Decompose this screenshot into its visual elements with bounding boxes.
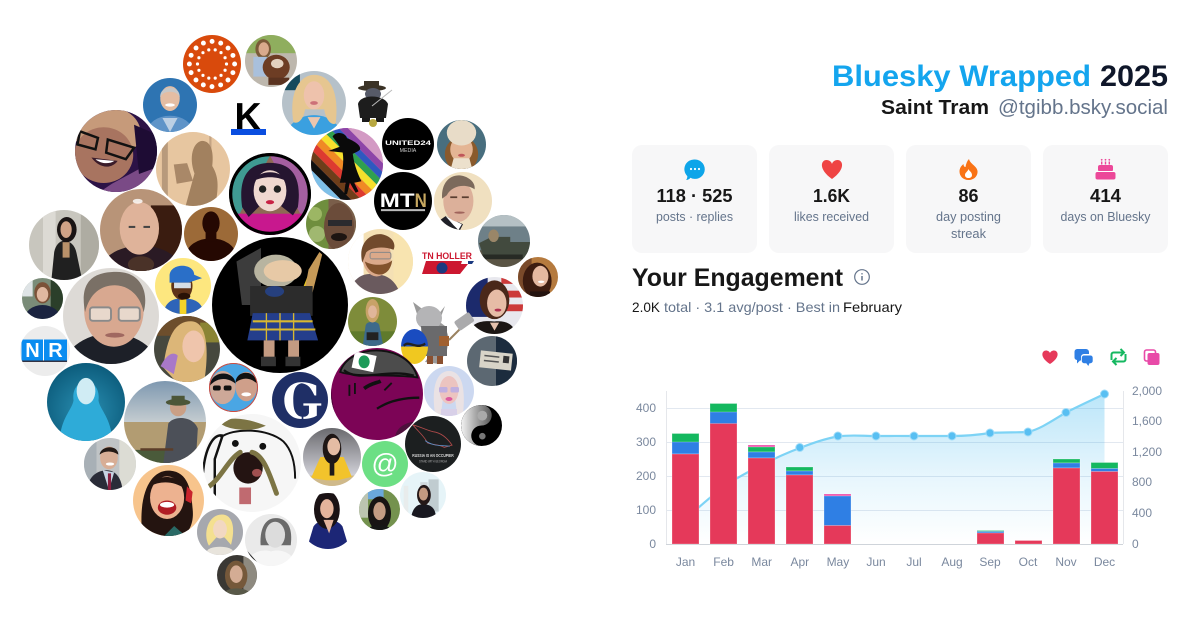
stacked bars: [672, 404, 1118, 544]
stat card: posts and replies: posts · replies: [656, 209, 733, 224]
avatar: man with glasses, large: [63, 268, 159, 364]
user name and handle: Saint Tram: [881, 97, 989, 119]
month labels: Nov: [1055, 555, 1077, 569]
stat card: likes received: [769, 145, 894, 253]
avatar: United24 Media: [382, 118, 434, 170]
avatar: MTN logo: MT: [380, 190, 415, 212]
avatar: dark silhouette: [184, 207, 238, 261]
avatar: Russia is an occupier map: [405, 416, 461, 472]
icon: speech bubble: [684, 159, 705, 180]
avatar: tank: [478, 215, 530, 267]
heading: Your Engagement: Your Engagement: [632, 264, 844, 292]
avatar: street poster: [467, 336, 517, 386]
month labels: Apr: [790, 555, 809, 569]
month labels: May: [827, 555, 849, 569]
engagement summary: [632, 299, 902, 315]
avatar: blonde woman glasses: [424, 366, 474, 416]
avatar: woman in yellow jacket: [303, 428, 361, 486]
stat card: posts and replies: [632, 145, 757, 253]
avatar: smiling man in blue: [143, 78, 197, 132]
avatar: sunglasses man: [306, 199, 356, 249]
bar: May: [824, 494, 851, 544]
stat card: likes received: 1.6K: [813, 186, 850, 206]
chart legend: [1042, 349, 1160, 366]
left axis labels: 400: [636, 401, 656, 415]
stat card: day posting streak: [906, 145, 1031, 253]
avatar: rainbow silhouette: [311, 128, 383, 200]
month labels: Jan: [676, 555, 695, 569]
avatar: winking man in suit: [434, 172, 492, 230]
avatar: woman near glass towers: [400, 472, 446, 518]
avatar: MTN logo: [374, 172, 432, 230]
bar: Mar: [748, 445, 775, 544]
icon: likes heart: [1042, 350, 1058, 364]
right axis labels: 2,000: [1132, 384, 1162, 398]
month labels: Mar: [751, 555, 772, 569]
avatar: Russia is an occupier map: STAND WITH GEORGIA: [419, 459, 448, 463]
left axis labels: 200: [636, 469, 656, 483]
avatar: green at sign: @: [371, 448, 399, 478]
icon: repost arrows: [1112, 349, 1126, 365]
avatar: two men with sunglasses: [209, 363, 258, 412]
avatar: anime blonde: [197, 509, 243, 555]
avatar: United24 Media: UNITED24: [385, 140, 431, 147]
icon: replies bubbles: [1074, 349, 1093, 366]
icon: quotes copy: [1144, 350, 1160, 365]
avatar: black and white woman: [245, 514, 297, 566]
user name and handle: [881, 97, 1168, 119]
engagement chart: [636, 384, 1162, 569]
month labels: Feb: [713, 555, 734, 569]
avatar: dark-haired woman outdoors: [359, 489, 400, 530]
bar: Nov: [1053, 459, 1080, 544]
avatar: woman in field: [348, 297, 397, 346]
avatar: shadow of woman: [156, 132, 230, 206]
avatar: anime girl with pink top: [229, 153, 311, 235]
icon: birthday cake: [1096, 159, 1116, 180]
avatar: bearded man in hoodie: [348, 229, 413, 294]
avatar: NR logo: N: [25, 340, 40, 362]
left axis labels: [636, 401, 656, 551]
cumulative area and line: [686, 390, 1108, 544]
bar: Feb: [710, 404, 737, 544]
avatar: small woman dark blazer: [22, 278, 63, 319]
avatar: dog with mustache drawing: [203, 414, 301, 512]
avatar: The Guardian G: [272, 372, 328, 428]
month labels: Dec: [1094, 555, 1115, 569]
avatar: woman with US flag: [466, 277, 523, 334]
logo: TN Holler: [422, 251, 474, 274]
avatar: MTN logo: N: [415, 190, 427, 212]
month labels: Sep: [979, 555, 1001, 569]
left axis labels: 100: [636, 503, 656, 517]
avatar: man at scenic overlook: [124, 381, 206, 463]
avatar: onion eggplant cartoon: [331, 348, 423, 440]
right axis labels: 800: [1132, 475, 1152, 489]
month labels: [676, 555, 1115, 569]
right panel: [600, 0, 1200, 630]
engagement summary: February: [843, 299, 902, 315]
avatar: Ukrainian shield: [401, 329, 428, 364]
avatar: suit man by building: [84, 438, 136, 490]
title: 2025: [1100, 60, 1168, 93]
user name and handle: @tgibb.bsky.social: [998, 97, 1168, 119]
logo: viking doge with hammer: [413, 302, 474, 364]
stat card: day posting streak: day posting: [936, 209, 1001, 224]
avatar: NR logo: R: [48, 340, 63, 362]
icon: flame: [960, 159, 978, 180]
chart gridlines and axes: [666, 391, 1124, 544]
avatar: doge in kilt, big black circle: [212, 237, 348, 373]
avatar: green at sign: [362, 441, 408, 487]
avatar: NR logo: [20, 326, 70, 376]
right axis labels: 1,200: [1132, 445, 1162, 459]
avatar: woman in beanie: [437, 120, 486, 169]
left axis labels: 0: [649, 537, 656, 551]
avatar cluster: [20, 35, 558, 595]
stat card: days on Bluesky: [1043, 145, 1168, 253]
avatar: brunette woman Kate: [518, 257, 558, 297]
logo: masked ninja character: [358, 81, 392, 127]
avatar: woman in black jacket: [29, 210, 99, 280]
avatar: laughing woman with red flower: [133, 465, 204, 536]
icon: info: [855, 270, 869, 284]
avatar: yin yang: [461, 405, 502, 446]
left axis labels: 300: [636, 435, 656, 449]
stat card: days on Bluesky: days on Bluesky: [1060, 209, 1151, 224]
icon: heart: [822, 160, 842, 179]
right axis labels: 0: [1132, 537, 1139, 551]
engagement summary: total · 3.1 avg/post · Best in: [664, 299, 840, 315]
stat card: day posting streak: streak: [951, 226, 986, 241]
stat card: days on Bluesky: 414: [1090, 186, 1121, 206]
right axis labels: 400: [1132, 506, 1152, 520]
bar: Dec: [1091, 462, 1118, 544]
avatar: United24 Media: MEDIA: [400, 148, 417, 154]
title: Bluesky Wrapped: [832, 60, 1091, 93]
right axis labels: 1,600: [1132, 414, 1162, 428]
avatar: orange rings: [183, 35, 241, 93]
right axis labels: [1132, 384, 1162, 551]
avatar: woman with dog: [245, 35, 297, 87]
stat card: likes received: likes received: [794, 209, 869, 224]
month labels: Aug: [941, 555, 963, 569]
stat card: day posting streak: 86: [958, 186, 978, 206]
engagement summary: 2.0K: [632, 299, 661, 315]
bar: Apr: [786, 467, 813, 544]
avatar: man with glasses, purple: [75, 110, 157, 192]
avatar: cartoon man with cap: [155, 258, 211, 314]
avatar: pink-blonde woman: [154, 316, 220, 382]
month labels: Jul: [906, 555, 922, 569]
stat card: posts and replies: 118 · 525: [656, 186, 732, 206]
month labels: Jun: [866, 555, 886, 569]
avatar: blonde woman in blue: [282, 71, 346, 135]
avatar: woman in navy blazer: [300, 493, 356, 549]
avatar: hooded figure: [47, 363, 125, 441]
bar: Oct: [1015, 540, 1042, 544]
month labels: Oct: [1019, 555, 1038, 569]
bar: Jan: [672, 434, 699, 544]
bar: Sep: [977, 530, 1004, 544]
avatar: bald man: [100, 189, 182, 271]
avatar: selfie woman: [217, 555, 257, 595]
